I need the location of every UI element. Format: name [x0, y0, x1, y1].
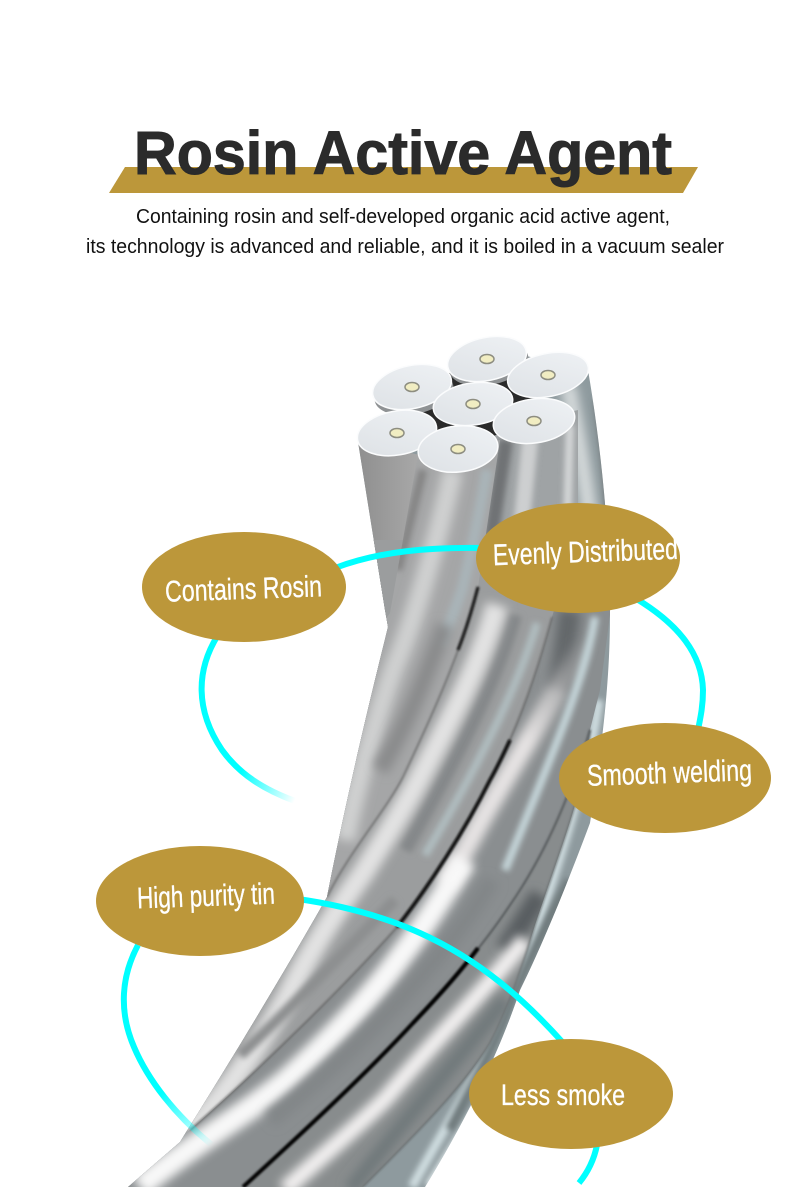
centre right strand top	[486, 410, 578, 534]
wire cross-section caps	[354, 330, 593, 476]
orbit: evenly to smooth	[635, 598, 703, 730]
orbit: smoke tail	[579, 1145, 597, 1183]
twisted tin wire cable	[120, 330, 620, 1187]
label: High purity tin	[96, 846, 304, 956]
groove D	[363, 730, 590, 1187]
cap 1	[368, 358, 456, 416]
strand A	[328, 440, 500, 889]
strand B	[186, 540, 554, 1132]
title gold bar	[109, 167, 698, 193]
label: Less smoke	[469, 1039, 673, 1149]
label: Less smoke: Less smoke	[501, 1079, 625, 1112]
back strand slivers	[371, 335, 532, 422]
orbit: rosin to evenly	[335, 548, 485, 568]
groove B	[190, 617, 552, 1130]
orbit: purity to smoke	[298, 899, 565, 1045]
title text: Rosin Active Agent	[134, 119, 672, 187]
groove C	[477, 729, 592, 950]
right strand base	[120, 340, 620, 1187]
cap 4	[430, 378, 516, 430]
title	[109, 119, 698, 193]
cap 5	[490, 394, 578, 448]
cap 7	[416, 422, 500, 476]
label: Contains Rosin	[142, 532, 346, 642]
flux cores	[390, 354, 555, 454]
cap 3	[503, 345, 593, 405]
subtitle text: Containing rosin and self-developed organic acid active agent,	[136, 206, 670, 228]
cap 2	[443, 330, 531, 388]
label: Evenly Distributed	[476, 503, 680, 613]
cyan orbit lines	[124, 548, 703, 1183]
label: High purity tin: High purity tin	[136, 878, 275, 915]
label: Contains Rosin: Contains Rosin	[164, 570, 323, 609]
back left strand	[358, 445, 420, 604]
strand D	[120, 540, 620, 1187]
subtitle text: its technology is advanced and reliable, and it is boiled in a vacuum sealer	[86, 236, 724, 258]
cable strands body	[120, 340, 620, 1187]
subtitle text	[86, 206, 724, 258]
orbit: purity tail	[124, 945, 212, 1145]
cap 6	[354, 404, 440, 462]
shadow gaps between caps	[397, 359, 548, 449]
label: Smooth welding: Smooth welding	[586, 754, 752, 793]
strand C	[120, 540, 620, 1187]
label: Evenly Distributed: Evenly Distributed	[492, 533, 678, 572]
label: Smooth welding	[559, 723, 771, 833]
groove A	[327, 587, 478, 897]
orbit: rosin tail	[202, 635, 295, 801]
infographic canvas	[87, 129, 771, 1187]
